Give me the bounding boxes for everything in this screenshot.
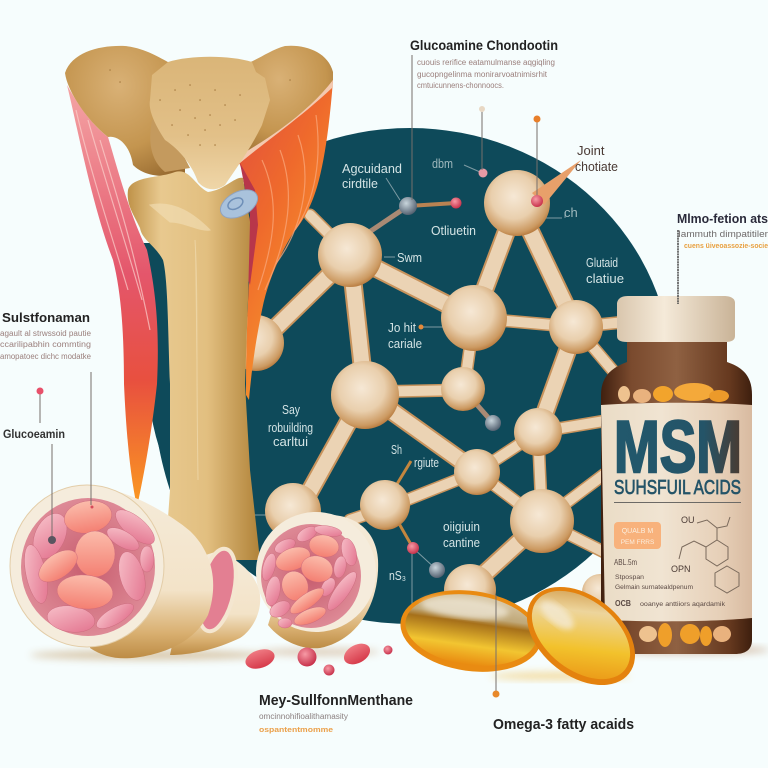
labels on teal backdrop <box>268 156 624 583</box>
label: orange badge: QUALB M <box>622 528 653 535</box>
label: fine print: OCB <box>615 598 631 608</box>
callout: Glucoamine Chondootin: Glucoamine Chondootin <box>410 37 558 53</box>
label: chemical structure: OU <box>681 515 694 525</box>
callout: Glucoamine Chondootin: cuouis rerifice eatamulmanse aqgiqling <box>417 58 555 67</box>
callout: Omega-3 fatty acaids: Omega-3 fatty acaids <box>493 716 634 733</box>
callout: Mey-Sullfonn Menthane: ospantentmomme <box>259 725 333 734</box>
softgels above label <box>618 383 729 403</box>
labels on teal backdrop: Jo hit <box>388 320 416 335</box>
callout: Glucoamine Chondootin <box>410 37 558 90</box>
callout: Sulstfonaman <box>0 311 92 361</box>
callout: Glucoeamin: Glucoeamin <box>3 427 65 441</box>
small red capsules <box>243 639 392 676</box>
stack: front disc interior <box>21 498 155 636</box>
label: fine print: Gelmain surnatealdpenum <box>615 584 693 591</box>
labels on teal backdrop: robuilding <box>268 420 313 435</box>
callout: Mey-Sullfonn Menthane <box>259 692 413 734</box>
bottle glass <box>601 342 752 654</box>
muscle top edge highlight <box>237 80 333 163</box>
stack: inner pink slice <box>192 545 242 635</box>
labels on teal backdrop: ch <box>564 205 578 220</box>
labels on teal backdrop: cirdtile <box>342 176 378 191</box>
right disc side <box>268 515 378 648</box>
patella <box>150 57 270 189</box>
label: chemical structure: OPN <box>671 564 691 574</box>
callout: Mey-Sullfonn Menthane: omcinnohifioalithamasity <box>259 712 348 721</box>
label: divider <box>614 502 741 503</box>
stack: front disc rim <box>10 485 164 647</box>
molecule bonds <box>255 165 625 605</box>
bottle cap <box>617 296 735 342</box>
molecule spheres <box>228 170 618 616</box>
teal backdrop circle <box>143 128 672 624</box>
label: orange badge <box>614 522 661 549</box>
callout: Glucoamine Chondootin: gucopngelinma monirarvoatnimisrhit <box>417 70 548 79</box>
labels on teal backdrop: carltui <box>273 434 308 449</box>
bone highlight <box>150 204 210 480</box>
blue pill <box>216 184 262 224</box>
callout: Glucoamine Chondootin: cmtuicunnens-chonnoocs. <box>417 81 504 90</box>
labels on teal backdrop: Agcuidand <box>342 161 402 176</box>
labels on teal backdrop: Say <box>282 402 300 417</box>
left muscle <box>67 85 158 507</box>
callout: Joint chotiate: Joint <box>577 143 605 158</box>
right disc interior <box>261 524 361 628</box>
labels on teal backdrop: Sh <box>391 442 402 457</box>
bone: lobes <box>65 46 333 178</box>
omega-3 softgel left <box>395 582 547 680</box>
bone: shaft and head <box>128 171 260 560</box>
label: chemical structure <box>671 515 739 593</box>
label: fine print <box>614 558 726 608</box>
callout: Sulstfonaman: ccarilipabhin commting <box>0 340 91 349</box>
labels on teal backdrop: nS₃ <box>389 568 406 583</box>
callout: Joint chotiate <box>575 143 618 174</box>
bone <box>65 46 333 560</box>
bone speckles <box>110 70 290 145</box>
callout: Mlm-fetion ats <box>677 211 768 250</box>
labels on teal backdrop: Swm <box>397 250 422 265</box>
labels on teal backdrop: rgiute <box>414 455 439 470</box>
labels on teal backdrop: clatiue <box>586 271 624 286</box>
callout: Mey-Sullfonn Menthane: Mey-SullfonnMenthane <box>259 692 413 709</box>
label: orange badge: PEM FRRS <box>621 539 655 546</box>
softgels below label <box>639 621 731 647</box>
supplement bottle <box>601 296 752 654</box>
stack: cylinder <box>90 488 213 658</box>
right muscle <box>237 80 333 400</box>
callout: Sulstfonaman: amopatoec dichc modatke <box>0 352 92 361</box>
label: fine print: ooanye anttiiors aqardamik <box>640 601 726 608</box>
leader lines and pins <box>36 55 678 698</box>
stack: rear segment <box>170 552 260 655</box>
callout: Joint chotiate: chotiate <box>575 159 618 174</box>
callout: Sulstfonaman: agault al strwssoid pautie <box>0 329 92 338</box>
label: fine print: ABL.5m <box>614 558 637 567</box>
omega-3 softgel right <box>508 567 654 705</box>
molecule network <box>228 160 625 616</box>
labels on teal backdrop: cantine <box>443 535 480 550</box>
callout: Mlm-fetion ats: Iammuth dimpatitiler <box>678 229 768 239</box>
labels on teal backdrop: oiigiuin <box>443 519 480 534</box>
labels on teal backdrop: Otliuetin <box>431 223 476 238</box>
right disc tissue ovals <box>260 523 361 629</box>
label: fine print: Stpospan <box>615 574 644 581</box>
molecule accent nodes <box>399 160 581 578</box>
labels on teal backdrop: Glutaid <box>586 255 618 270</box>
right disc rim <box>239 495 393 649</box>
labels on teal backdrop: dbm <box>432 156 453 171</box>
labels on teal backdrop: cariale <box>388 336 422 351</box>
stack: tissue ovals <box>20 497 160 635</box>
floor shadows <box>30 646 768 680</box>
bottle label <box>601 403 752 621</box>
callout: Sulstfonaman: Sulstfonaman <box>2 311 90 325</box>
callout: Mlm-fetion ats: cuens üiveoassozie-socie <box>684 243 768 250</box>
bone: inner fold <box>150 120 190 172</box>
cartilage cross-section stack <box>10 485 393 658</box>
